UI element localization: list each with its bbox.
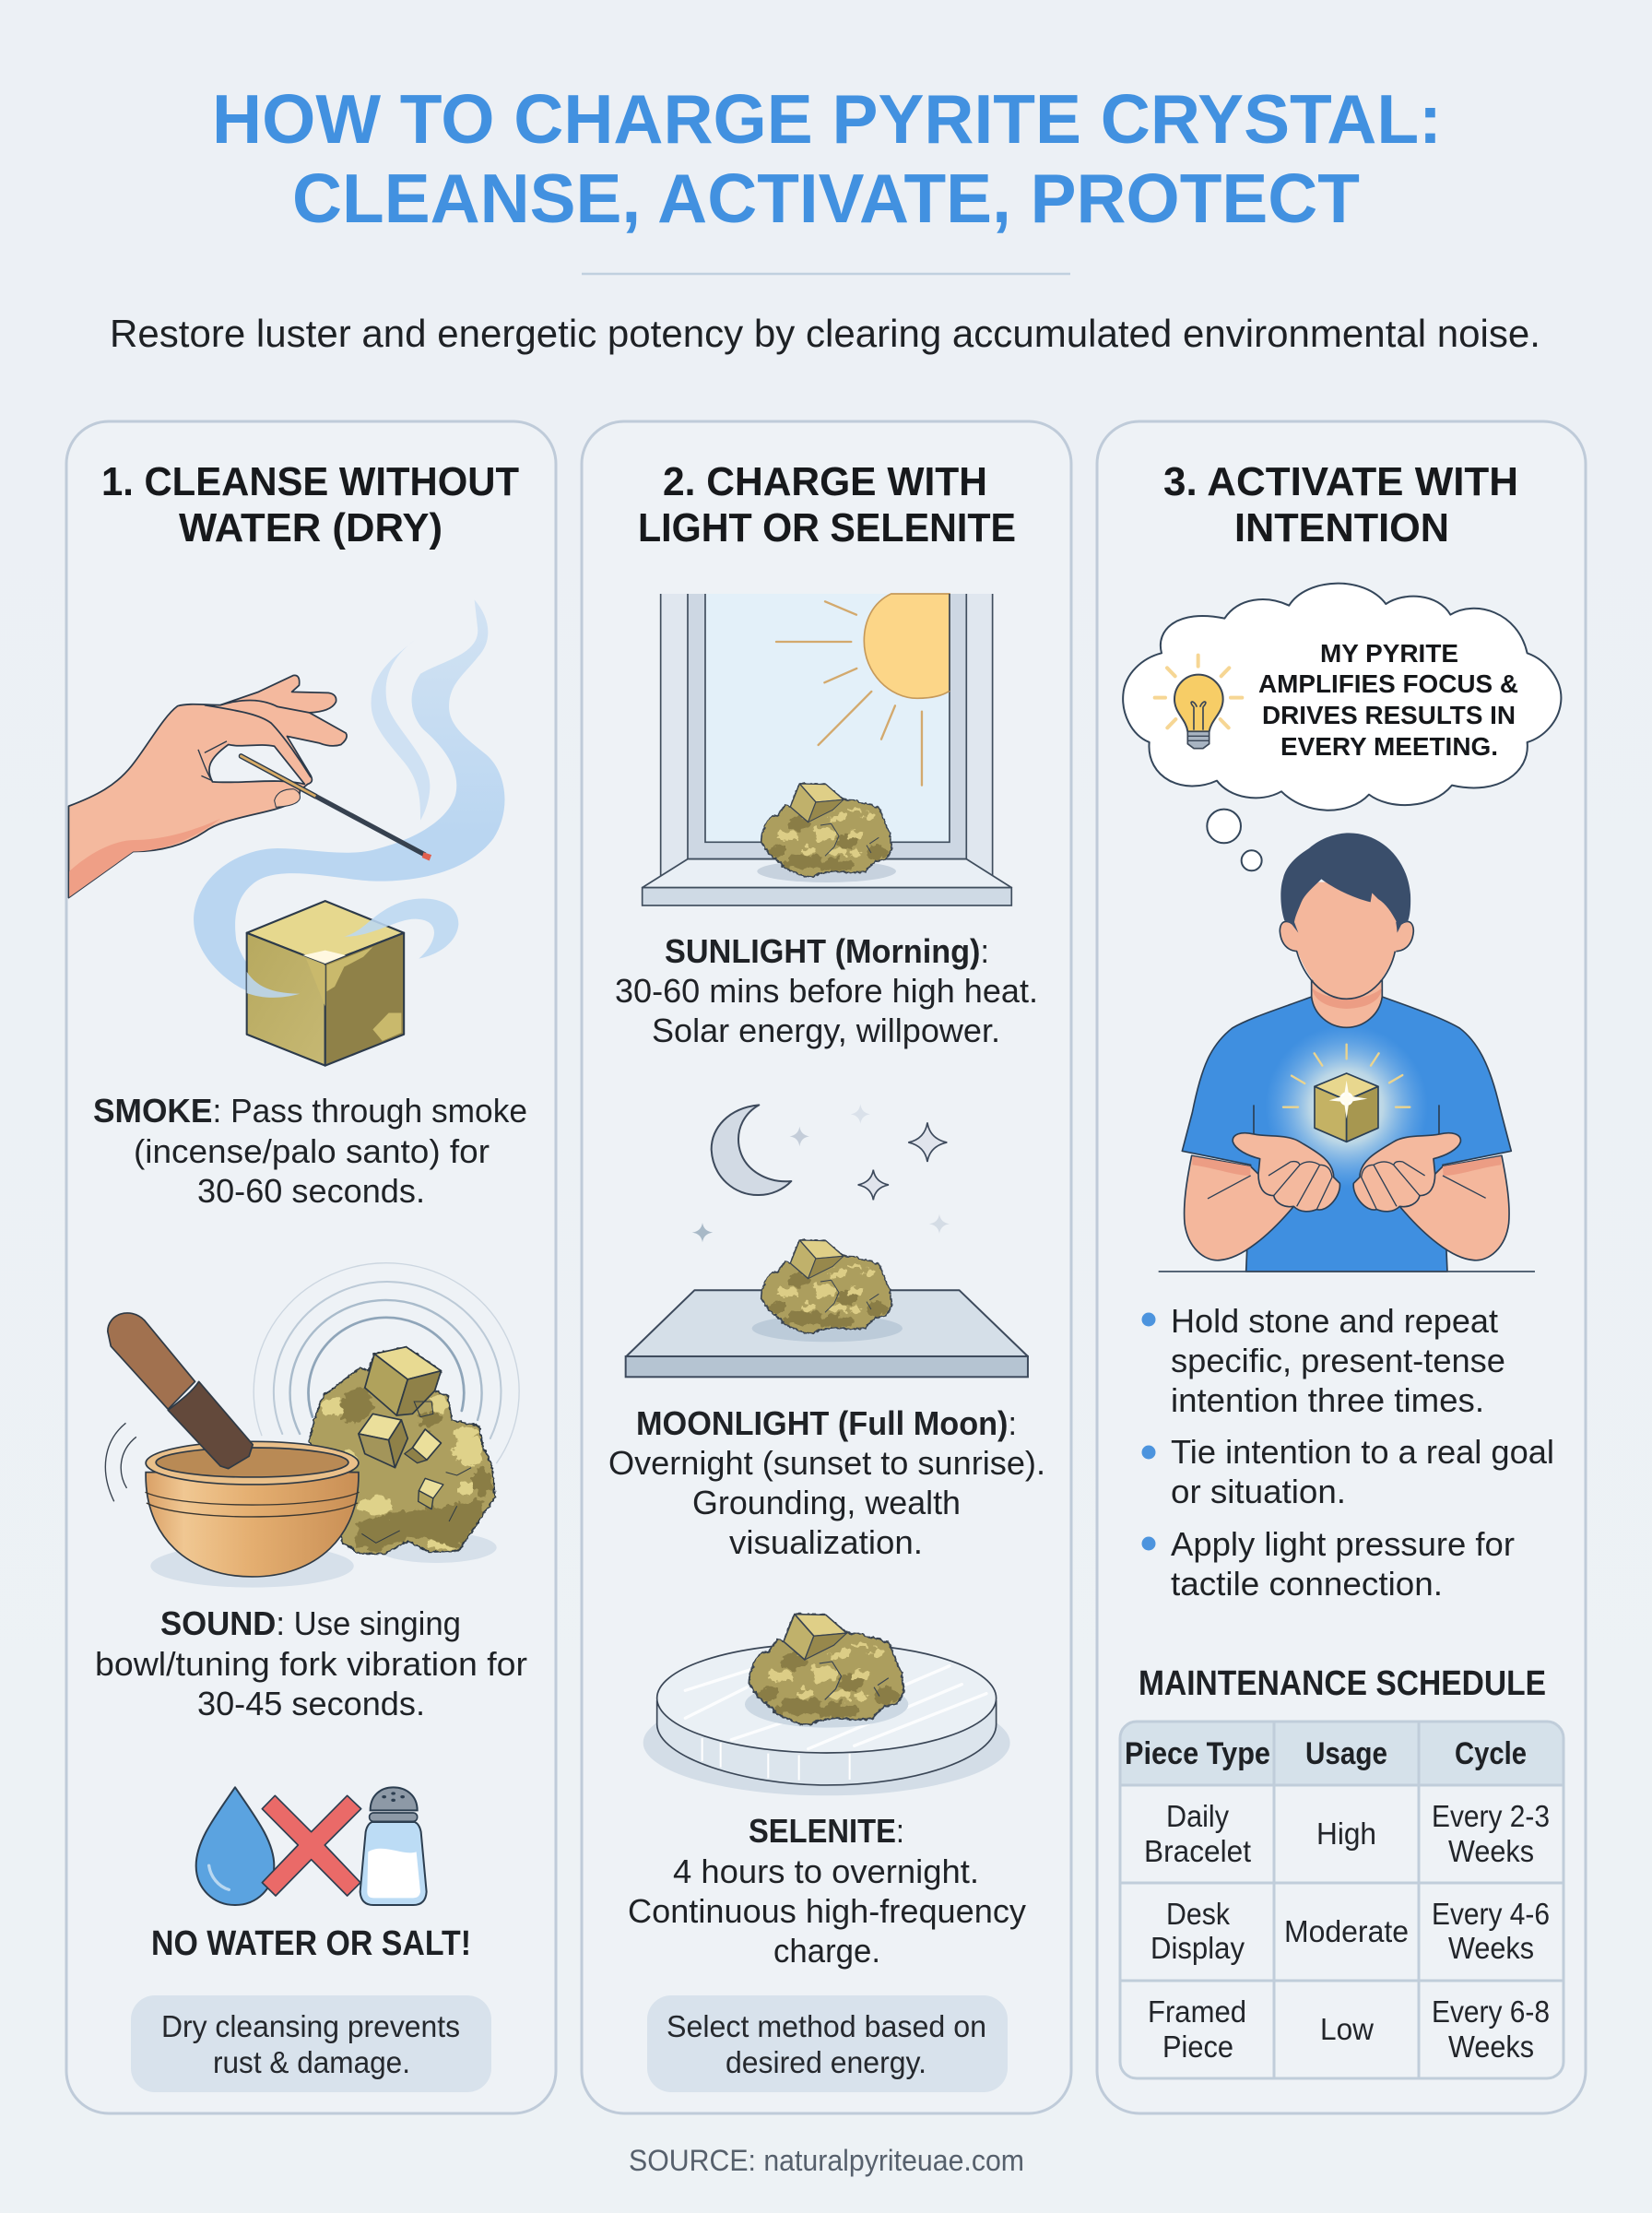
text: sound [95, 1604, 527, 1722]
table: maintenance schedule: Display [1150, 1931, 1245, 1965]
text: moonlight [608, 1404, 1045, 1561]
text: selenite: 4 hours to overnight. [673, 1852, 979, 1890]
note: select method [647, 1995, 1008, 2092]
text: moonlight: Grounding, wealth [692, 1484, 961, 1521]
bullet list: Apply light pressure for [1171, 1525, 1515, 1563]
heading: activate: 3. ACTIVATE WITH [1163, 459, 1518, 504]
illustration: moonlight on slab [626, 1104, 1028, 1377]
heading: charge: LIGHT OR SELENITE [638, 505, 1016, 550]
table: maintenance schedule: Moderate [1284, 1914, 1409, 1948]
title: CLEANSE, ACTIVATE, PROTECT [292, 160, 1360, 237]
illustration: hand with incense over pyrite cube [68, 599, 505, 1066]
title [212, 80, 1442, 237]
table: maintenance schedule: Every 2-3 [1432, 1799, 1550, 1833]
table: maintenance schedule: High [1316, 1817, 1376, 1851]
table: maintenance schedule: Bracelet [1144, 1834, 1251, 1868]
bullet list: Hold stone and repeat [1171, 1302, 1498, 1340]
note: dry cleansing: Dry cleansing prevents [161, 2009, 460, 2043]
table: maintenance schedule: Usage [1305, 1736, 1387, 1771]
text: sunlight [615, 932, 1038, 1049]
table: maintenance schedule: Low [1320, 2012, 1374, 2046]
bullet list: Tie intention to a real goal [1171, 1433, 1554, 1471]
heading: activate: INTENTION [1234, 505, 1449, 550]
text: selenite: Continuous high-frequency [628, 1892, 1026, 1930]
table: maintenance schedule: Framed [1148, 1994, 1246, 2029]
text: moonlight: MOONLIGHT (Full Moon): [636, 1404, 1017, 1442]
text: sunlight: Solar energy, willpower. [652, 1012, 1000, 1049]
warning: no water or salt: NO WATER OR SALT! [151, 1924, 471, 1963]
bullet list: or situation. [1171, 1473, 1346, 1510]
text: selenite: SELENITE: [749, 1812, 904, 1850]
illustration: person holding glowing pyrite [1159, 833, 1535, 1272]
table: maintenance schedule: Piece Type [1125, 1736, 1270, 1771]
bullet list [1141, 1302, 1554, 1603]
note: select method: desired energy. [726, 2045, 926, 2079]
subtitle: Restore luster and energetic potency by clearing accumulated environmental noise. [110, 312, 1540, 355]
panel: 3 activate with intention [1097, 421, 1586, 2113]
heading: activate [1163, 459, 1518, 550]
thought bubble [1123, 584, 1561, 870]
table: maintenance schedule: Cycle [1455, 1736, 1527, 1771]
bullet list: specific, present-tense [1171, 1342, 1505, 1379]
illustration: sunlight window [643, 594, 1011, 905]
heading: charge: 2. CHARGE WITH [663, 459, 987, 504]
note: dry cleansing [131, 1995, 491, 2092]
text: moonlight: visualization. [729, 1523, 923, 1561]
thought bubble: AMPLIFIES FOCUS & [1258, 669, 1518, 698]
source line: SOURCE: naturalpyriteuae.com [629, 2144, 1024, 2177]
text: selenite [628, 1812, 1026, 1970]
table: maintenance schedule [1120, 1722, 1564, 2078]
text: moonlight: Overnight (sunset to sunrise). [608, 1444, 1045, 1482]
text: sunlight: SUNLIGHT (Morning): [665, 932, 989, 970]
table: maintenance schedule: Every 4-6 [1432, 1897, 1550, 1931]
table: maintenance schedule: Piece [1162, 2030, 1233, 2064]
table: maintenance schedule: Every 6-8 [1432, 1994, 1550, 2029]
thought bubble: DRIVES RESULTS IN [1262, 701, 1516, 729]
text: smoke: 30-60 seconds. [197, 1172, 425, 1210]
text: smoke [93, 1092, 527, 1210]
text: sound: SOUND: Use singing [160, 1604, 461, 1642]
heading: cleanse: 1. CLEANSE WITHOUT [101, 459, 519, 504]
text: smoke: SMOKE: Pass through smoke [93, 1092, 527, 1130]
table: maintenance schedule: Daily [1166, 1799, 1229, 1833]
text: smoke: (incense/palo santo) for [134, 1132, 490, 1170]
heading: cleanse [101, 459, 519, 550]
illustration: singing bowl and pyrite [105, 1263, 519, 1588]
bullet list: intention three times. [1171, 1381, 1484, 1419]
heading: charge [638, 459, 1016, 550]
text: sound: bowl/tuning fork vibration for [95, 1645, 527, 1683]
thought bubble: EVERY MEETING. [1280, 732, 1498, 761]
text: sound: 30-45 seconds. [197, 1685, 425, 1722]
text: selenite: charge. [773, 1932, 880, 1970]
text: sunlight: 30-60 mins before high heat. [615, 972, 1038, 1010]
panel: 1 cleanse without water [66, 421, 556, 2113]
table: maintenance schedule: Weeks [1448, 1834, 1534, 1868]
title: HOW TO CHARGE PYRITE CRYSTAL: [212, 80, 1442, 158]
icon: no water or salt [196, 1787, 427, 1905]
note: select method: Select method based on [667, 2009, 986, 2043]
table: maintenance schedule: Desk [1166, 1897, 1230, 1931]
bullet list: tactile connection. [1171, 1565, 1443, 1603]
table: maintenance schedule: Weeks [1448, 2030, 1534, 2064]
illustration: selenite plate [643, 1615, 1010, 1795]
heading: cleanse: WATER (DRY) [179, 505, 442, 550]
note: dry cleansing: rust & damage. [213, 2045, 410, 2079]
heading: maintenance schedule: MAINTENANCE SCHEDULE [1139, 1664, 1546, 1703]
table: maintenance schedule: Weeks [1448, 1931, 1534, 1965]
panel: 2 charge with light or selenite [582, 421, 1071, 2113]
thought bubble: MY PYRITE [1320, 639, 1458, 668]
